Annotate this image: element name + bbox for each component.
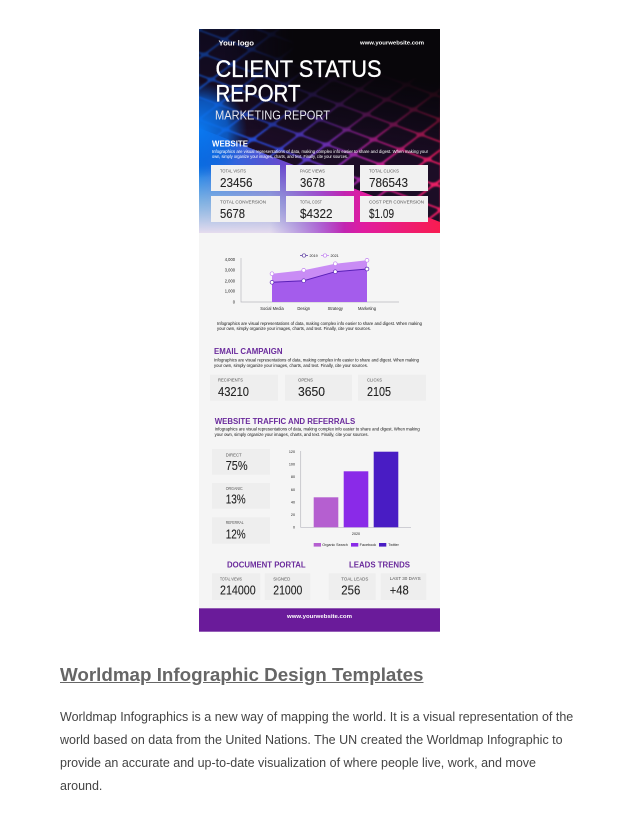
chart legend: 2021: [330, 254, 339, 258]
heading: document portal: DOCUMENT PORTAL: [227, 560, 306, 570]
traffic stat cards: 75%: [226, 459, 248, 473]
chart legend: [300, 254, 339, 258]
keyboard photo background: [199, 29, 440, 233]
bar chart: 2020: [352, 532, 360, 536]
website stat cards: TOTAL CLICKS: [369, 168, 399, 174]
website stat cards: $4322: [300, 207, 333, 221]
panel: header hero: [199, 29, 440, 233]
footer band: www.yourwebsite.com: [286, 614, 352, 620]
traffic stat cards: 13%: [226, 492, 246, 506]
area chart: 3,000: [225, 267, 236, 272]
email description: [214, 357, 420, 368]
website stat cards: TOTAL COST: [300, 200, 322, 204]
area chart: [225, 254, 399, 311]
bar chart: [289, 450, 411, 547]
email stat cards: RECIPIENTS: [218, 378, 243, 382]
document and leads cards: +48: [390, 584, 409, 598]
website description: own, simply organize your images, charts, and text. Finally, cite your sources.: [212, 154, 348, 159]
website stat cards: 23456: [220, 176, 253, 190]
website description: Infographics are visual representations of data, making complex info easier to share and digest. When making your: [212, 149, 429, 154]
email description: your own, simply organize your images, charts, and text. Finally, cite your sources.: [214, 363, 368, 368]
bar chart: 40: [291, 500, 295, 504]
heading: website traffic and referrals: WEBSITE TRAFFIC AND REFERRALS: [215, 417, 356, 426]
traffic stat cards: ORGANIC: [226, 486, 243, 491]
chart legend: 2019: [310, 254, 318, 258]
website stat cards: PAGE VIEWS: [300, 168, 325, 174]
title: REPORT: [216, 80, 301, 108]
infographic: [199, 29, 440, 632]
title: [216, 56, 382, 108]
website stat cards: 5678: [220, 207, 245, 221]
email stat cards: 2105: [367, 385, 391, 399]
article paragraph: around.: [60, 779, 102, 793]
article paragraph: world based on data from the United Nations. The UN created the Worldmap Infographic to: [60, 733, 563, 747]
bar chart: 80: [291, 475, 295, 479]
subtitle: MARKETING REPORT: [215, 108, 330, 122]
article paragraph: provide an accurate and up-to-date visualization of where people live, work, and move: [60, 756, 536, 770]
email stat cards: 43210: [218, 385, 249, 399]
website stat cards: COST PER CONVERSION: [369, 200, 424, 204]
bar legend: Organic Search: [322, 543, 348, 547]
website heading: WEBSITE: [212, 140, 248, 148]
traffic description: your own, simply organize your images, charts, and text. Finally, cite your sources.: [215, 432, 369, 437]
website stat cards: TOTAL CONVERSION: [220, 200, 266, 204]
document and leads cards: 214000: [220, 584, 256, 598]
panel: report body: [199, 233, 440, 609]
area chart: 2,000: [225, 278, 236, 283]
bar chart: 0: [293, 526, 295, 530]
bar chart: 100: [289, 462, 295, 466]
area chart: Social Media: [260, 306, 284, 311]
area chart: Strategy: [328, 306, 344, 311]
heading: leads trends: LEADS TRENDS: [349, 560, 411, 570]
document and leads cards: TOAL LEADS: [341, 576, 368, 582]
area chart: 4,000: [225, 257, 236, 262]
website description: [212, 149, 429, 159]
email stat cards: [210, 375, 426, 401]
bar legend: [314, 543, 400, 547]
heading: email campaign: EMAIL CAMPAIGN: [214, 347, 283, 356]
website stat cards: TOTAL VISITS: [220, 168, 246, 174]
article paragraph: Worldmap Infographics is a new way of mapping the world. It is a visual representation of the: [60, 710, 573, 724]
chart description: [217, 321, 423, 331]
email stat cards: CLICKS: [367, 378, 382, 382]
article paragraph: [60, 710, 573, 793]
bar chart: 20: [291, 513, 295, 517]
website stat cards: $1.09: [369, 207, 394, 221]
website url: www.yourwebsite.com: [359, 40, 424, 46]
title: CLIENT STATUS: [216, 56, 382, 83]
footer band: [199, 608, 440, 632]
area chart: 1,000: [225, 288, 236, 294]
chart description: Infographics are visual representations of data, making complex info easier to share and digest. When making: [217, 321, 423, 326]
logo text: Your logo: [218, 38, 254, 48]
website stat cards: [211, 165, 428, 222]
traffic stat cards: DIRECT: [226, 452, 242, 458]
area chart: Marketing: [358, 306, 377, 311]
article heading: Worldmap Infographic Design Templates: [60, 664, 424, 685]
document and leads cards: 256: [341, 584, 360, 598]
document and leads cards: TOTAL VIEWS: [220, 576, 242, 582]
bar chart: 60: [291, 488, 295, 492]
bar legend: Twitter: [388, 543, 400, 547]
traffic stat cards: REFERRAL: [226, 520, 244, 525]
website stat cards: 3678: [300, 176, 325, 190]
traffic stat cards: [212, 449, 270, 544]
email description: Infographics are visual representations of data, making complex info easier to share and digest. When making: [214, 357, 420, 362]
website stat cards: 786543: [369, 176, 408, 190]
area chart: 0: [233, 299, 236, 304]
area chart: Design: [297, 306, 311, 311]
bar chart: 120: [289, 450, 295, 454]
traffic description: Infographics are visual representations of data, making complex info easier to share and digest. When making: [215, 426, 420, 432]
traffic description: [215, 426, 420, 437]
document and leads cards: LAST 30 DAYS: [390, 576, 421, 581]
document and leads cards: [212, 573, 426, 600]
document and leads cards: SIGNED: [273, 576, 291, 582]
chart description: your own, simply organize your images, charts, and text. Finally, cite your sources.: [217, 326, 371, 331]
email stat cards: OPENS: [298, 378, 313, 382]
document and leads cards: 21000: [273, 584, 302, 598]
traffic stat cards: 12%: [226, 528, 246, 542]
bar legend: Facebook: [360, 543, 376, 547]
email stat cards: 3650: [298, 385, 325, 399]
